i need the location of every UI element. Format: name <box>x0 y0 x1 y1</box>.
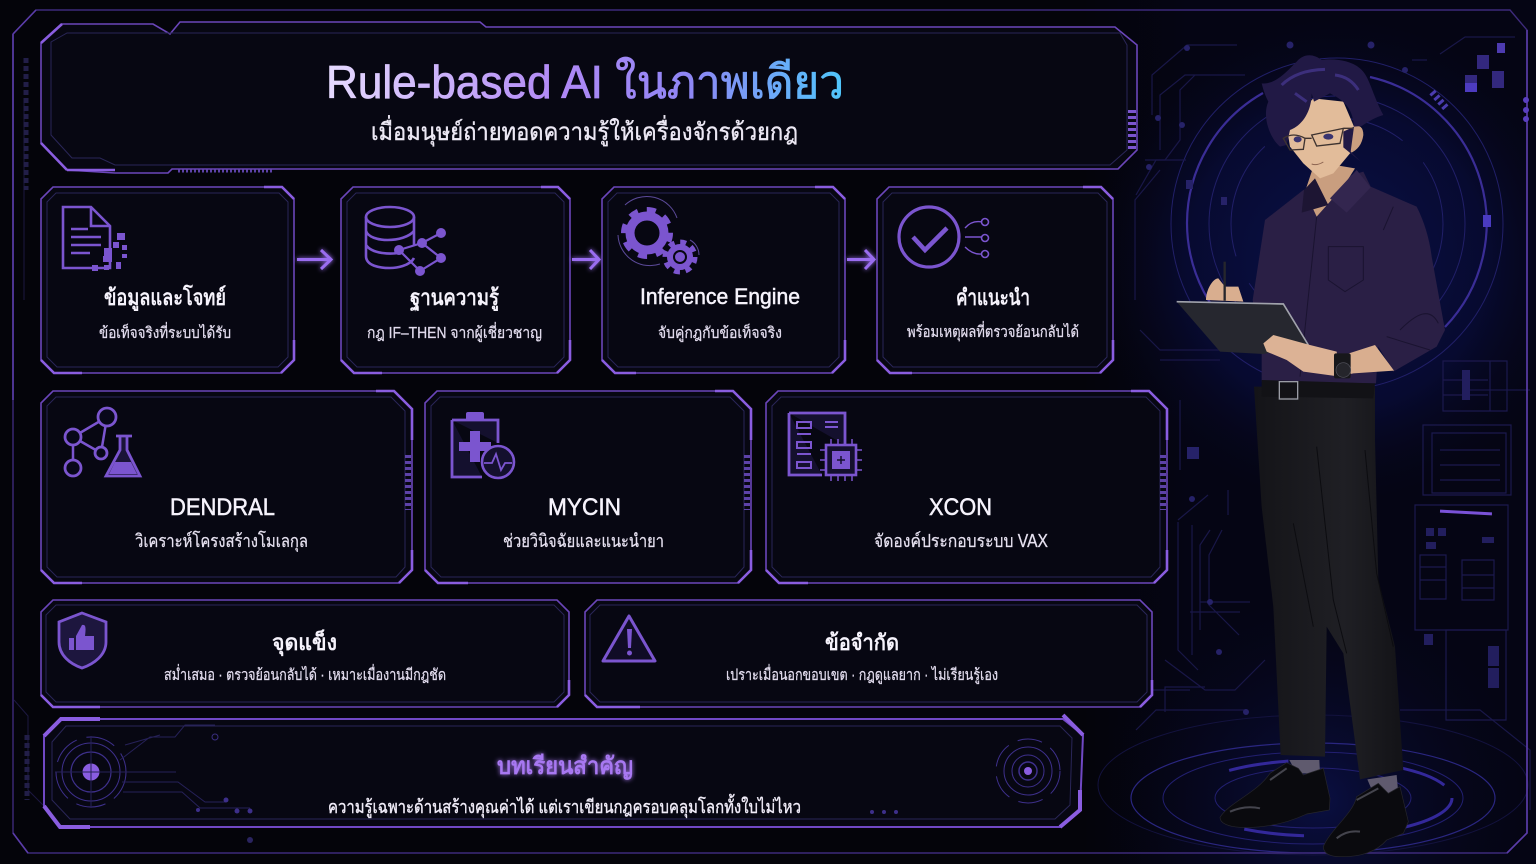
background data panels <box>1415 361 1511 720</box>
card heading: จุดแข็ง <box>272 628 337 657</box>
trouser creases <box>1293 447 1393 653</box>
forearm <box>1333 345 1394 377</box>
icon: warning triangle <box>603 616 655 661</box>
background dots <box>1146 42 1491 715</box>
shirt <box>1253 172 1445 383</box>
arrow <box>572 250 599 269</box>
panel: title <box>41 22 1137 173</box>
card frame <box>877 187 1113 373</box>
icon: gears <box>618 196 699 272</box>
background data accents <box>1424 370 1499 688</box>
title frame <box>41 22 1137 173</box>
right background glow <box>1080 0 1536 864</box>
icon: medical clipboard <box>452 412 514 478</box>
card text: ช่วยวินิจฉัยและแนะนำยา <box>503 531 664 551</box>
card heading: Inference Engine <box>640 284 800 309</box>
card heading: ข้อจำกัด <box>825 630 899 655</box>
pen <box>1221 262 1228 301</box>
card heading: ข้อมูลและโจทย์ <box>104 284 226 312</box>
lesson text: ความรู้เฉพาะด้านสร้างคุณค่าได้ แต่เราเขียนกฎครอบคลุมโลกทั้งใบไม่ไหว <box>328 794 801 818</box>
panel: facts and problem <box>41 187 294 373</box>
panel: recommendation <box>877 187 1113 373</box>
right lesson dots <box>870 810 898 814</box>
panel: knowledge base <box>341 187 570 373</box>
icon: molecule and flask <box>65 408 140 476</box>
card heading: ฐานความรู้ <box>410 285 499 312</box>
icon: document with data pixels <box>63 207 127 271</box>
eyes <box>1294 134 1333 142</box>
glasses <box>1283 128 1353 150</box>
card frame <box>766 391 1167 583</box>
background hud: circuit rings <box>1171 58 1503 390</box>
ear <box>1350 126 1363 153</box>
right target graphic <box>996 739 1060 803</box>
neck <box>1305 162 1355 217</box>
left target dots <box>196 798 252 814</box>
card heading: DENDRAL <box>170 494 275 521</box>
lesson frame <box>44 715 1083 827</box>
belt <box>1262 380 1375 399</box>
card text: ข้อเท็จจริงที่ระบบได้รับ <box>99 322 231 342</box>
card heading: MYCIN <box>548 494 621 521</box>
panel: inference engine <box>602 187 845 373</box>
socks <box>1289 760 1398 793</box>
icon: shield with thumb up <box>59 613 106 668</box>
card frame <box>41 600 569 707</box>
card frame <box>41 391 412 583</box>
arrow <box>297 250 331 269</box>
card frame <box>41 187 294 373</box>
left shoe <box>1220 763 1330 827</box>
card text: วิเคราะห์โครงสร้างโมเลกุล <box>135 530 308 552</box>
tablet <box>1177 302 1308 354</box>
card text: เปราะเมื่อนอกขอบเขต · กฎดูแลยาก · ไม่เรียนรู้เอง <box>726 664 998 685</box>
holographic floor rings <box>1098 715 1528 855</box>
panel: MYCIN <box>425 391 751 583</box>
side hair <box>1343 127 1361 162</box>
card frame <box>602 187 845 373</box>
pants <box>1254 387 1403 779</box>
left target graphic <box>55 725 250 808</box>
card frame <box>341 187 570 373</box>
title subtitle: เมื่อมนุษย์ถ่ายทอดความรู้ให้เครื่องจักรด้วยกฎ <box>371 115 798 147</box>
card frame <box>425 391 751 583</box>
hair highlight <box>1282 69 1358 102</box>
watch <box>1334 353 1351 378</box>
card text: จัดองค์ประกอบระบบ VAX <box>874 531 1048 551</box>
card text: สม่ำเสมอ · ตรวจย้อนกลับได้ · เหมาะเมื่องานมีกฎชัด <box>164 664 446 684</box>
card heading: XCON <box>929 494 992 521</box>
icon: database with network <box>366 207 446 276</box>
left hand <box>1206 278 1243 302</box>
mouth <box>1312 162 1323 165</box>
card frame <box>585 600 1152 707</box>
right frame dots <box>1523 97 1529 122</box>
icon: check with branches <box>899 207 988 267</box>
arrow <box>847 250 874 269</box>
panel: limitations <box>585 600 1152 707</box>
shoe highlights <box>1230 768 1378 838</box>
character torso and head <box>1177 55 1445 399</box>
card text: พร้อมเหตุผลที่ตรวจย้อนกลับได้ <box>907 321 1079 342</box>
card text: กฎ IF–THEN จากผู้เชี่ยวชาญ <box>367 322 542 343</box>
lesson heading: บทเรียนสำคัญ <box>497 753 633 780</box>
character: man with tablet <box>1177 55 1445 857</box>
card text: จับคู่กฎกับข้อเท็จจริง <box>658 323 782 343</box>
face <box>1287 98 1354 178</box>
right shoe <box>1323 783 1408 857</box>
background hud: circuit traces <box>1135 37 1530 810</box>
top-right pixel blocks <box>1465 43 1505 92</box>
character legs <box>1220 387 1408 857</box>
panel: key lesson <box>44 715 1083 827</box>
right hand <box>1263 335 1340 377</box>
shirt folds <box>1300 207 1438 377</box>
panel: strengths <box>41 600 569 707</box>
icon: config sheet and chip <box>789 413 862 481</box>
title heading: Rule-based AI ในภาพเดียว <box>326 56 844 108</box>
hair <box>1262 55 1383 147</box>
collar <box>1302 170 1371 213</box>
panel: XCON <box>766 391 1167 583</box>
card heading: คำแนะนำ <box>956 285 1030 310</box>
panel: DENDRAL <box>41 391 412 583</box>
